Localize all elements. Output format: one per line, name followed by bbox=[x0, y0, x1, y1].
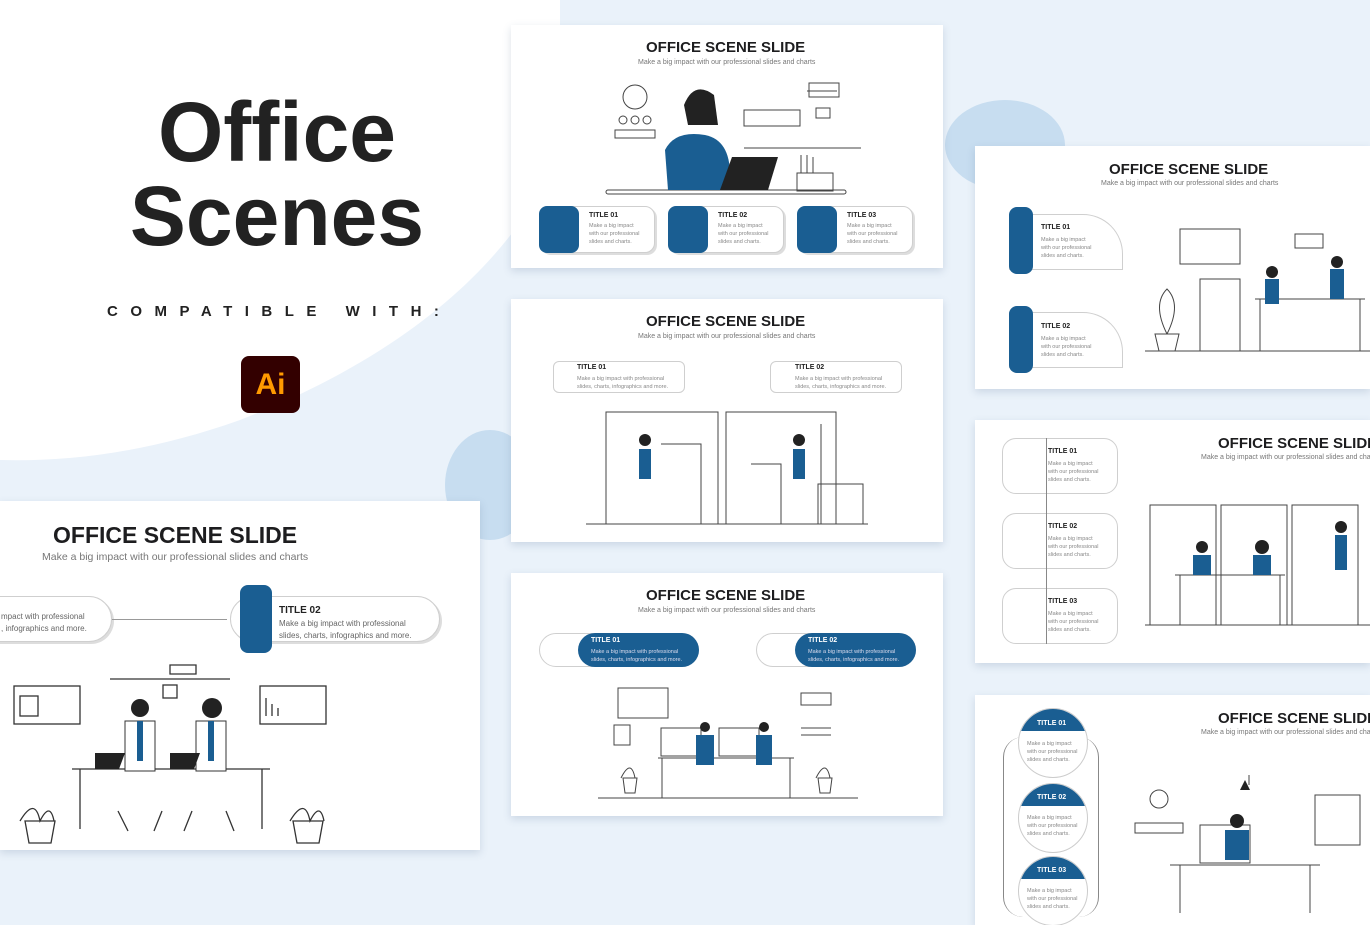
panel: slide C: Make a big impact with professional bbox=[795, 376, 882, 382]
card title 01: mpact with professional bbox=[1, 612, 85, 621]
card title 02: TITLE 02 bbox=[279, 605, 321, 616]
panel: slide E: TITLE 02 bbox=[1041, 323, 1070, 330]
panel: slide G: with our professional bbox=[1027, 823, 1077, 829]
panel: slide G: TITLE 03 bbox=[1037, 867, 1066, 874]
card title 02: slides, charts, infographics and more. bbox=[279, 631, 412, 640]
panel: slide E: Make a big impact bbox=[1041, 336, 1086, 342]
icon: illustrator bbox=[241, 356, 300, 413]
panel: slide B: slides and charts. bbox=[718, 239, 761, 245]
panel: slide B: with our professional bbox=[718, 231, 768, 237]
panel: slide C: Make a big impact with professional bbox=[577, 376, 664, 382]
panel: slide C: slides, charts, infographics and more. bbox=[577, 384, 668, 390]
illustration bbox=[1134, 775, 1360, 913]
panel: slide G: slides and charts. bbox=[1027, 757, 1070, 763]
panel: slide G: with our professional bbox=[1027, 749, 1077, 755]
panel: slide E: OFFICE SCENE SLIDE bbox=[1109, 161, 1268, 178]
panel: slide F: slides and charts. bbox=[1048, 477, 1091, 483]
compatible with: COMPATIBLE WITH: bbox=[107, 303, 451, 320]
panel: slide G: slides and charts. bbox=[1027, 904, 1070, 910]
panel: slide B: Make a big impact bbox=[589, 223, 634, 229]
background white blob bbox=[0, 0, 560, 460]
panel: slide C bbox=[511, 299, 943, 542]
panel: slide F: Make a big impact bbox=[1048, 611, 1093, 617]
panel: slide G: with our professional bbox=[1027, 896, 1077, 902]
panel: slide D: slides, charts, infographics and more. bbox=[591, 657, 682, 663]
panel: slide B: Make a big impact bbox=[847, 223, 892, 229]
panel: slide E: slides and charts. bbox=[1041, 352, 1084, 358]
panel: slide G: TITLE 02 bbox=[1037, 794, 1066, 801]
panel: slide E bbox=[975, 146, 1370, 389]
panel: slide E: Make a big impact bbox=[1041, 237, 1086, 243]
panel: slide D: OFFICE SCENE SLIDE bbox=[646, 587, 805, 604]
panel: slide B: TITLE 02 bbox=[718, 212, 747, 219]
panel: slide E: with our professional bbox=[1041, 344, 1091, 350]
panel: slide G: Make a big impact bbox=[1027, 741, 1072, 747]
panel: slide G: Make a big impact bbox=[1027, 888, 1072, 894]
panel: slide E: slides and charts. bbox=[1041, 253, 1084, 259]
panel: slide E: with our professional bbox=[1041, 245, 1091, 251]
panel: slide G: slides and charts. bbox=[1027, 831, 1070, 837]
panel: slide F: Make a big impact bbox=[1048, 536, 1093, 542]
panel: slide F: slides and charts. bbox=[1048, 627, 1091, 633]
panel: slide F: Make a big impact bbox=[1048, 461, 1093, 467]
panel: slide G: TITLE 01 bbox=[1037, 720, 1066, 727]
panel: slide B: Make a big impact bbox=[718, 223, 763, 229]
panel: slide F: slides and charts. bbox=[1048, 552, 1091, 558]
panel: slide C: TITLE 02 bbox=[795, 364, 824, 371]
panel: slide C: Make a big impact with our professional slides and charts bbox=[638, 333, 815, 340]
panel: slide A left: Make a big impact with our professional slides and charts bbox=[42, 551, 308, 563]
panel: slide D: Make a big impact with our professional slides and charts bbox=[638, 607, 815, 614]
main title: Scenes bbox=[130, 169, 424, 263]
panel: slide E: Make a big impact with our professional slides and charts bbox=[1101, 180, 1278, 187]
panel: slide D: Make a big impact with professional bbox=[808, 649, 895, 655]
panel: slide C: OFFICE SCENE SLIDE bbox=[646, 313, 805, 330]
illustration bbox=[1145, 504, 1370, 626]
icon: illustrator: Ai bbox=[256, 368, 286, 401]
heading: OFFICE SCENE SLIDE bbox=[53, 522, 297, 548]
panel: slide E: TITLE 01 bbox=[1041, 224, 1070, 231]
cards bbox=[539, 206, 655, 253]
panel: slide B: TITLE 01 bbox=[589, 212, 618, 219]
illustration: woman with coffee bbox=[606, 82, 861, 194]
panel: slide B: Make a big impact with our professional slides and charts bbox=[638, 59, 815, 66]
main title: Office bbox=[158, 85, 396, 179]
panel: slide G bbox=[975, 695, 1370, 925]
panel: slide A left bbox=[0, 501, 480, 850]
panel: slide F: with our professional bbox=[1048, 544, 1098, 550]
panel: slide G: Make a big impact bbox=[1027, 815, 1072, 821]
panel: slide D: slides, charts, infographics and more. bbox=[808, 657, 899, 663]
panel: slide B: TITLE 03 bbox=[847, 212, 876, 219]
panel: slide B: with our professional bbox=[847, 231, 897, 237]
panel: slide F: TITLE 03 bbox=[1048, 598, 1077, 605]
card title 02 bbox=[230, 596, 440, 642]
panel: slide F: with our professional bbox=[1048, 619, 1098, 625]
illustration bbox=[598, 688, 858, 798]
card title 02: Make a big impact with professional bbox=[279, 619, 406, 628]
panel: slide F: TITLE 02 bbox=[1048, 523, 1077, 530]
panel: slide D bbox=[511, 573, 943, 816]
panel: slide F bbox=[975, 420, 1370, 663]
background blue blobs bbox=[445, 430, 535, 540]
panel: slide C: slides, charts, infographics and more. bbox=[795, 384, 886, 390]
panel: slide F: with our professional bbox=[1048, 469, 1098, 475]
panel: slide B: slides and charts. bbox=[589, 239, 632, 245]
card title 01: , infographics and more. bbox=[1, 624, 87, 633]
panel: slide D: Make a big impact with professional bbox=[591, 649, 678, 655]
panel: slide B: slides and charts. bbox=[847, 239, 890, 245]
panel: slide F: TITLE 01 bbox=[1048, 448, 1077, 455]
panel: slide C: TITLE 01 bbox=[577, 364, 606, 371]
panel: slide B: with our professional bbox=[589, 231, 639, 237]
card title 01 bbox=[0, 596, 112, 642]
panel: slide B bbox=[511, 25, 943, 268]
illustration bbox=[586, 412, 868, 524]
illustration bbox=[1145, 228, 1370, 352]
illustration: two people at desk bbox=[13, 664, 327, 844]
main title bbox=[130, 85, 424, 263]
panel: slide D: TITLE 01 bbox=[591, 637, 620, 644]
panel: slide B: OFFICE SCENE SLIDE bbox=[646, 39, 805, 56]
panel: slide D: TITLE 02 bbox=[808, 637, 837, 644]
